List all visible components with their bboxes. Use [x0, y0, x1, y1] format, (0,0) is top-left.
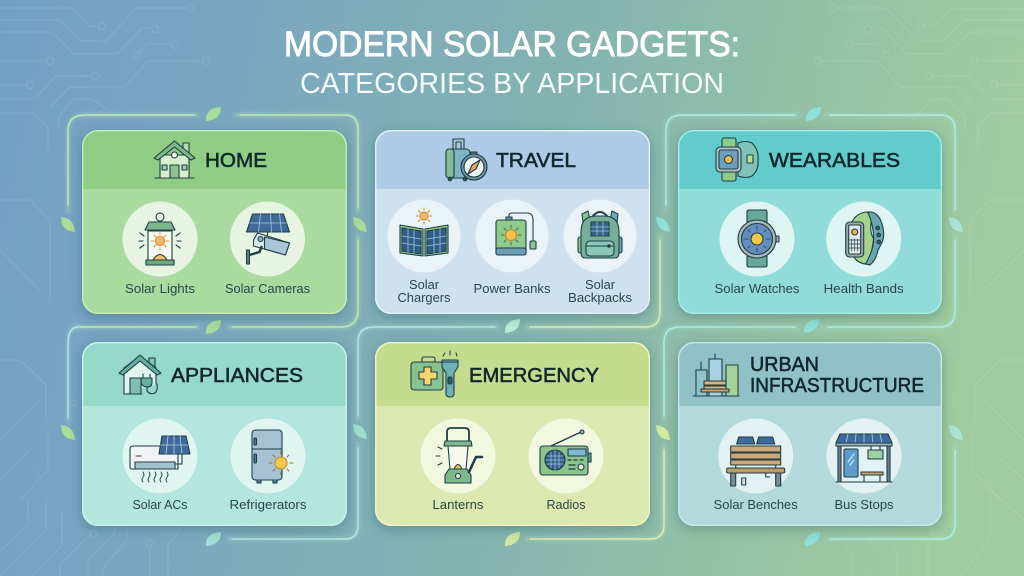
panel: appliances — [82, 342, 347, 526]
panel: urban infrastructure — [678, 342, 942, 526]
heading: travel: TRAVEL — [496, 150, 576, 172]
item: solar chargers: Chargers — [398, 291, 450, 305]
label: Solar Benches — [714, 498, 798, 512]
label: Solar Cameras — [225, 282, 310, 296]
item: solar benches — [714, 418, 798, 512]
title: MODERN SOLAR GADGETS: — [284, 25, 740, 64]
item: power banks — [474, 200, 550, 296]
label: Solar Watches — [714, 282, 800, 296]
icon: first aid kit and flashlight — [411, 351, 458, 397]
item: bus stops — [826, 418, 902, 512]
heading: home: HOME — [205, 150, 267, 172]
item: solar backpacks: Backpacks — [568, 291, 632, 305]
label: Radios — [546, 498, 586, 512]
title: CATEGORIES BY APPLICATION — [300, 68, 724, 100]
heading: emergency: EMERGENCY — [469, 365, 599, 387]
label: Solar — [409, 278, 439, 292]
label: Solar Lights — [125, 282, 195, 296]
label: Solar ACs — [132, 498, 188, 512]
icon: city and bench — [693, 354, 739, 396]
label: Solar — [585, 278, 615, 292]
label: Refrigerators — [230, 498, 306, 512]
item: solar backpacks — [564, 200, 636, 305]
icon: house — [154, 141, 195, 178]
panel: home — [82, 130, 347, 314]
panel: wearables — [678, 130, 942, 314]
title — [284, 25, 740, 100]
icon: suitcase and compass — [446, 139, 487, 181]
label: Bus Stops — [834, 498, 894, 512]
label: Lanterns — [432, 498, 484, 512]
heading: appliances: APPLIANCES — [171, 365, 303, 387]
heading: urban infrastructure: INFRASTRUCTURE — [750, 375, 924, 397]
heading: urban infrastructure: URBAN — [750, 354, 819, 376]
panel: travel — [375, 130, 650, 314]
leaf accents — [61, 107, 963, 546]
panel: emergency — [375, 342, 650, 526]
label: Health Bands — [824, 282, 904, 296]
heading: wearables: WEARABLES — [769, 150, 900, 172]
icon: watches — [716, 138, 758, 181]
item: radios — [528, 418, 604, 512]
item: refrigerators — [230, 418, 306, 512]
item: solar lights — [122, 202, 198, 296]
glowing connector lines — [68, 115, 955, 539]
label: Power Banks — [474, 282, 550, 296]
item: health bands — [824, 202, 904, 296]
icon: house with plug — [119, 355, 161, 394]
item: solar watches — [714, 202, 800, 296]
heading: urban infrastructure — [750, 354, 924, 397]
item: solar chargers — [388, 200, 460, 305]
item: solar cameras — [225, 202, 310, 296]
item: solar acs — [122, 418, 198, 512]
item: lanterns — [420, 418, 496, 512]
